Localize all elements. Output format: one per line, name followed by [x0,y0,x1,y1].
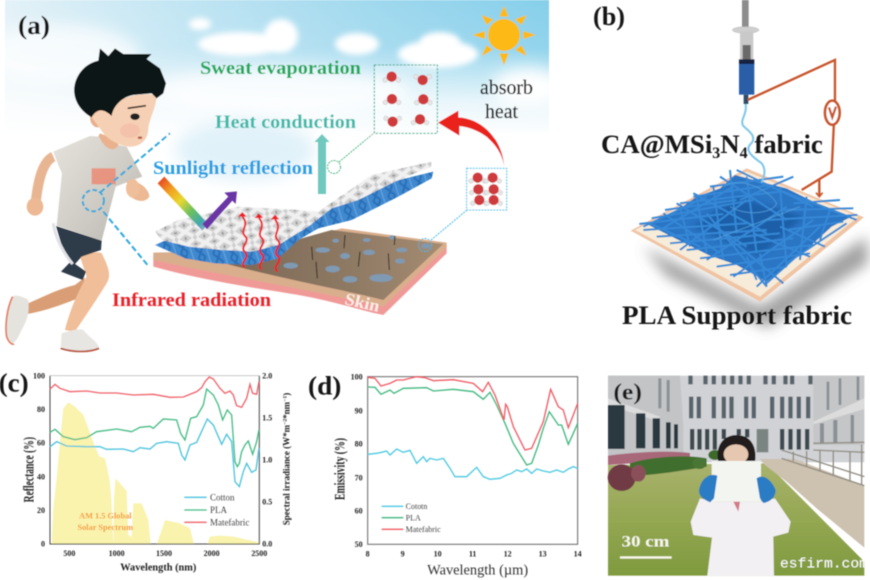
label: CA@MSi3N4 fabric: N [720,129,740,159]
x axis ticks: 9 [401,549,405,558]
right axis ticks: 1.0 [262,455,272,464]
PLA support platform [631,168,864,302]
legend: Matefabric [210,517,249,527]
y axis ticks: 100 [351,373,363,382]
bottom axis ticks: 2500 [251,549,267,558]
legend [382,502,441,534]
high voltage circuit [748,60,840,197]
label: Skin: Skin [343,289,382,316]
arrow: absorb heat red curve [438,111,504,167]
left axis ticks: 40 [37,472,45,481]
arrow: heat conduction [314,134,330,194]
label: Sweat evaporation: Sweat evaporation [200,58,361,79]
right axis ticks: 1.5 [262,413,272,422]
icon: rainbow sunlight bar [158,177,208,231]
top frame line [50,375,259,377]
CA@MSi3N4 fiber mat [639,170,857,287]
label: Heat conduction: Heat conduction [215,112,356,133]
right axis title: Spectral irradiance: −2 [282,419,288,425]
arrow: purple reflected light [202,191,237,229]
legend: PLA [406,513,421,522]
plot frame [50,376,259,544]
label: PLA Support fabric: PLA Support fabric [622,301,852,330]
legend [184,492,249,527]
right axis title: Spectral irradiance: ) [281,393,291,396]
y axis ticks: 50 [355,540,363,549]
curve: PLA [50,389,259,467]
person in lab coat holding fabric [691,435,791,576]
label: Infrared radiation: Infrared radiation [112,290,271,311]
left axis ticks: 0 [41,540,45,549]
sky background [0,0,564,180]
fabric layers [155,162,433,265]
y axis ticks: 70 [355,473,363,482]
right axis title: Spectral irradiance: −1 [282,396,288,402]
curve: Matefabric [50,377,259,407]
legend: PLA [210,505,227,515]
panel: a (thermal management schematic) [0,0,564,351]
callout: dashed zoom lines from shirt to fabric [83,133,170,266]
legend: Cototn [406,502,427,511]
right axis ticks: 2.0 [262,371,272,380]
area: AM 1.5 solar spectrum [52,402,259,544]
label: Sunlight reflection: Sunlight reflection [153,158,313,179]
x axis title: Wavelength (µm): Wavelength (µm) [427,562,528,578]
callout: evaporated water molecules box [374,65,437,133]
bottom axis ticks: 1000 [109,549,125,558]
skin block [153,228,447,315]
panel label (d): (d) [308,371,341,400]
x axis ticks: 11 [469,549,476,558]
y axis ticks: 90 [355,406,363,415]
paved walkway [760,459,864,548]
left axis ticks: 100 [33,371,45,380]
right axis ticks [262,371,272,549]
curve: Cotton [368,449,578,479]
bottom axis ticks: 1500 [156,549,172,558]
label: heat: heat [485,101,518,123]
scale label 30 cm: 30 cm [622,534,670,551]
left axis ticks: 60 [37,439,45,448]
x axis ticks: 10 [434,549,442,558]
bottom axis ticks [63,549,267,558]
panel: b (electrospinning schematic) [593,0,868,330]
icon: sun [472,6,536,65]
solar spectrum annotation: AM 1.5 Global [79,511,132,520]
panel: e (photo of fabric outdoors) [608,376,868,576]
callout: skin sweat circle and leader [418,210,467,252]
bottom axis ticks: 500 [63,549,75,558]
syringe [732,0,759,104]
label: CA@MSi3N4 fabric: CA@MSi [601,129,712,159]
legend: Matefabric [406,525,441,534]
scale bar [620,556,672,559]
label: absorb: absorb [480,77,533,99]
callout: sweat molecules box with leader [467,168,507,210]
label: CA@MSi3N4 fabric: fabric [748,129,823,159]
panel label (a): (a) [18,11,50,40]
lawn [608,463,864,576]
callout: green zoom circle with leader [328,133,374,174]
x axis ticks [366,549,582,558]
label: CA@MSi3N4 fabric: 4 [740,145,748,162]
curve: Cotton [50,419,259,487]
left axis ticks: 80 [37,405,45,414]
y axis ticks: 60 [355,507,363,516]
label: CA@MSi3N4 fabric: 3 [712,145,720,162]
panel label (e): (e) [613,379,642,405]
y axis title: Reflectance: Reflectance (%) [21,437,37,502]
y axis title: Emissivity: Emissivity (%) [332,438,348,500]
watermark: esfirm.com [780,557,868,573]
solar spectrum annotation: Solar Spectrum [78,523,133,532]
left axis ticks: 20 [37,506,45,515]
solar spectrum annotation [78,511,133,532]
electrospinning jet [742,104,764,183]
left axis ticks [33,371,45,549]
x axis ticks: 13 [539,549,547,558]
right axis ticks: 0.0 [262,540,272,549]
y axis ticks: 80 [355,440,363,449]
y axis ticks [351,373,363,549]
right axis ticks: 0.5 [262,497,272,506]
right axis title: Spectral irradiance: *nm [281,401,291,419]
hedges [608,450,722,491]
illustration: running boy [6,48,166,351]
curve: Matefabric [368,377,578,450]
x axis ticks: 14 [574,549,582,558]
panel: c (reflectance chart) [0,369,291,574]
railing [782,442,864,486]
x axis title: Wavelength (nm): Wavelength (nm) [120,563,196,574]
right axis title: Spectral irradiance: Spectral irradiance (W*m [281,425,291,525]
curve: PLA [368,387,578,465]
x axis ticks: 8 [366,549,370,558]
bottom axis ticks: 2000 [204,549,220,558]
panel: d (emissivity chart) [308,371,582,578]
x axis ticks: 12 [504,549,512,558]
plot frame [368,377,578,544]
building backdrop [608,376,864,462]
arrows: infrared radiation waves [238,212,279,272]
panel label (b): (b) [593,2,625,31]
legend: Cotton [210,492,235,502]
platform shadow [643,237,868,328]
